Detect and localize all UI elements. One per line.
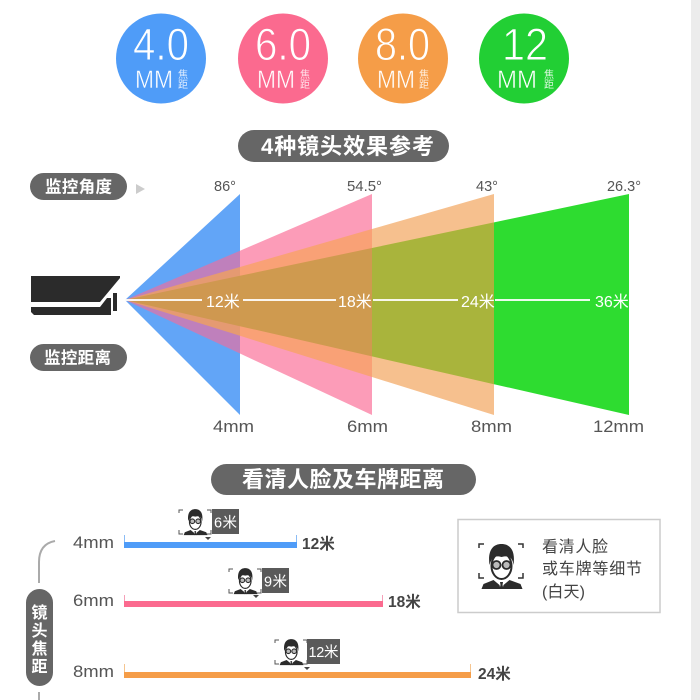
row: 8mm distance bar (73, 663, 511, 683)
legend text (542, 538, 642, 601)
icon: face recognition person (479, 544, 523, 589)
chart: field of view cones (125, 194, 629, 415)
label: lens focal length: 头 (31, 622, 48, 640)
marker: 6m face distance: 6米 (214, 514, 238, 532)
focal length badge: 6.0 MM: 6.0 (255, 19, 311, 70)
row: 6mm distance bar: 18米 (388, 593, 421, 611)
icon: security camera (31, 276, 120, 315)
focal length badge: 8.0 MM (358, 14, 448, 104)
label: lens focal length: 距 (31, 659, 48, 676)
focal length badge: 12 MM: 焦 (544, 68, 554, 81)
label: lens focal length: 镜 (31, 603, 48, 622)
distance axis line and labels: 24米 (461, 293, 495, 311)
distance axis line and labels: 36米 (595, 293, 629, 311)
row: 4mm distance bar (73, 534, 335, 553)
distance axis line and labels: 18米 (338, 293, 372, 311)
focal length badge: 8.0 MM: 焦 (419, 68, 429, 81)
row: 6mm distance bar: 6mm (73, 592, 114, 610)
label: monitoring distance: 监控距离 (44, 348, 111, 368)
lens labels under cones: 6mm (347, 418, 388, 436)
marker: 9m face distance (229, 568, 289, 598)
label: lens focal length (26, 589, 53, 686)
legend text: 或车牌等细节 (542, 560, 642, 578)
legend text: (白天) (542, 583, 585, 601)
focal length badge: 12 MM: 12 (502, 19, 548, 70)
heading: face and plate distance: 看清人脸及车牌距离 (242, 467, 444, 492)
row: 6mm distance bar (73, 592, 421, 611)
focal length badge: 6.0 MM: 焦 (300, 68, 310, 81)
row: 8mm distance bar: 8mm (73, 663, 114, 681)
focal length badge: 4.0 MM: 4.0 (133, 19, 189, 70)
label: lens focal length: 焦 (31, 639, 48, 658)
row: 4mm distance bar: 4mm (73, 534, 114, 552)
focal length badge: 4.0 MM: 距 (178, 79, 188, 91)
angle labels: 86° (214, 178, 236, 195)
row: 8mm distance bar: 24米 (478, 665, 511, 683)
focal length badge: 4.0 MM: MM (135, 66, 173, 94)
distance axis line and labels: 12米 (206, 293, 240, 311)
label: monitoring angle (30, 173, 127, 200)
heading: face and plate distance (211, 464, 476, 495)
lens labels under cones (213, 418, 644, 436)
connector: bracket above lens label (39, 541, 55, 583)
connector: line below lens label (38, 692, 40, 700)
marker: 9m face distance: 9米 (264, 574, 288, 590)
focal length badge: 4.0 MM: 焦 (178, 68, 188, 81)
marker: 12m face distance: 12米 (308, 644, 339, 661)
angle labels: 26.3° (607, 178, 641, 195)
angle labels: 43° (476, 178, 498, 195)
lens labels under cones: 4mm (213, 418, 254, 436)
distance axis line and labels (125, 293, 629, 311)
angle labels (214, 178, 641, 195)
heading: lens effect reference (238, 130, 449, 162)
focal length badge: 12 MM: MM (497, 66, 537, 94)
angle labels: 54.5° (347, 178, 382, 195)
legend box (458, 520, 660, 612)
label: monitoring distance (30, 344, 127, 371)
lens labels under cones: 12mm (593, 418, 644, 436)
focal length badge: 6.0 MM: MM (257, 66, 295, 94)
heading: lens effect reference: 4种镜头效果参考 (261, 134, 434, 159)
focal length badge: 12 MM: 距 (544, 79, 554, 91)
focal length badge: 4.0 MM (116, 14, 206, 104)
label: monitoring angle: 监控角度 (45, 176, 112, 196)
lens labels under cones: 8mm (471, 418, 512, 436)
focal length badge: 12 MM (479, 14, 569, 104)
focal length badge: 8.0 MM: 8.0 (375, 19, 430, 70)
row: 4mm distance bar: 12米 (302, 535, 335, 553)
legend text: 看清人脸 (542, 538, 608, 556)
focal length badge: 6.0 MM (238, 14, 328, 104)
focal length badge: 8.0 MM: MM (377, 66, 415, 94)
focal length badge: 6.0 MM: 距 (300, 79, 310, 91)
focal length badge: 8.0 MM: 距 (419, 79, 429, 91)
marker: 12m face distance (275, 639, 340, 670)
icon: small arrow (136, 184, 145, 194)
marker: 6m face distance (179, 509, 239, 540)
